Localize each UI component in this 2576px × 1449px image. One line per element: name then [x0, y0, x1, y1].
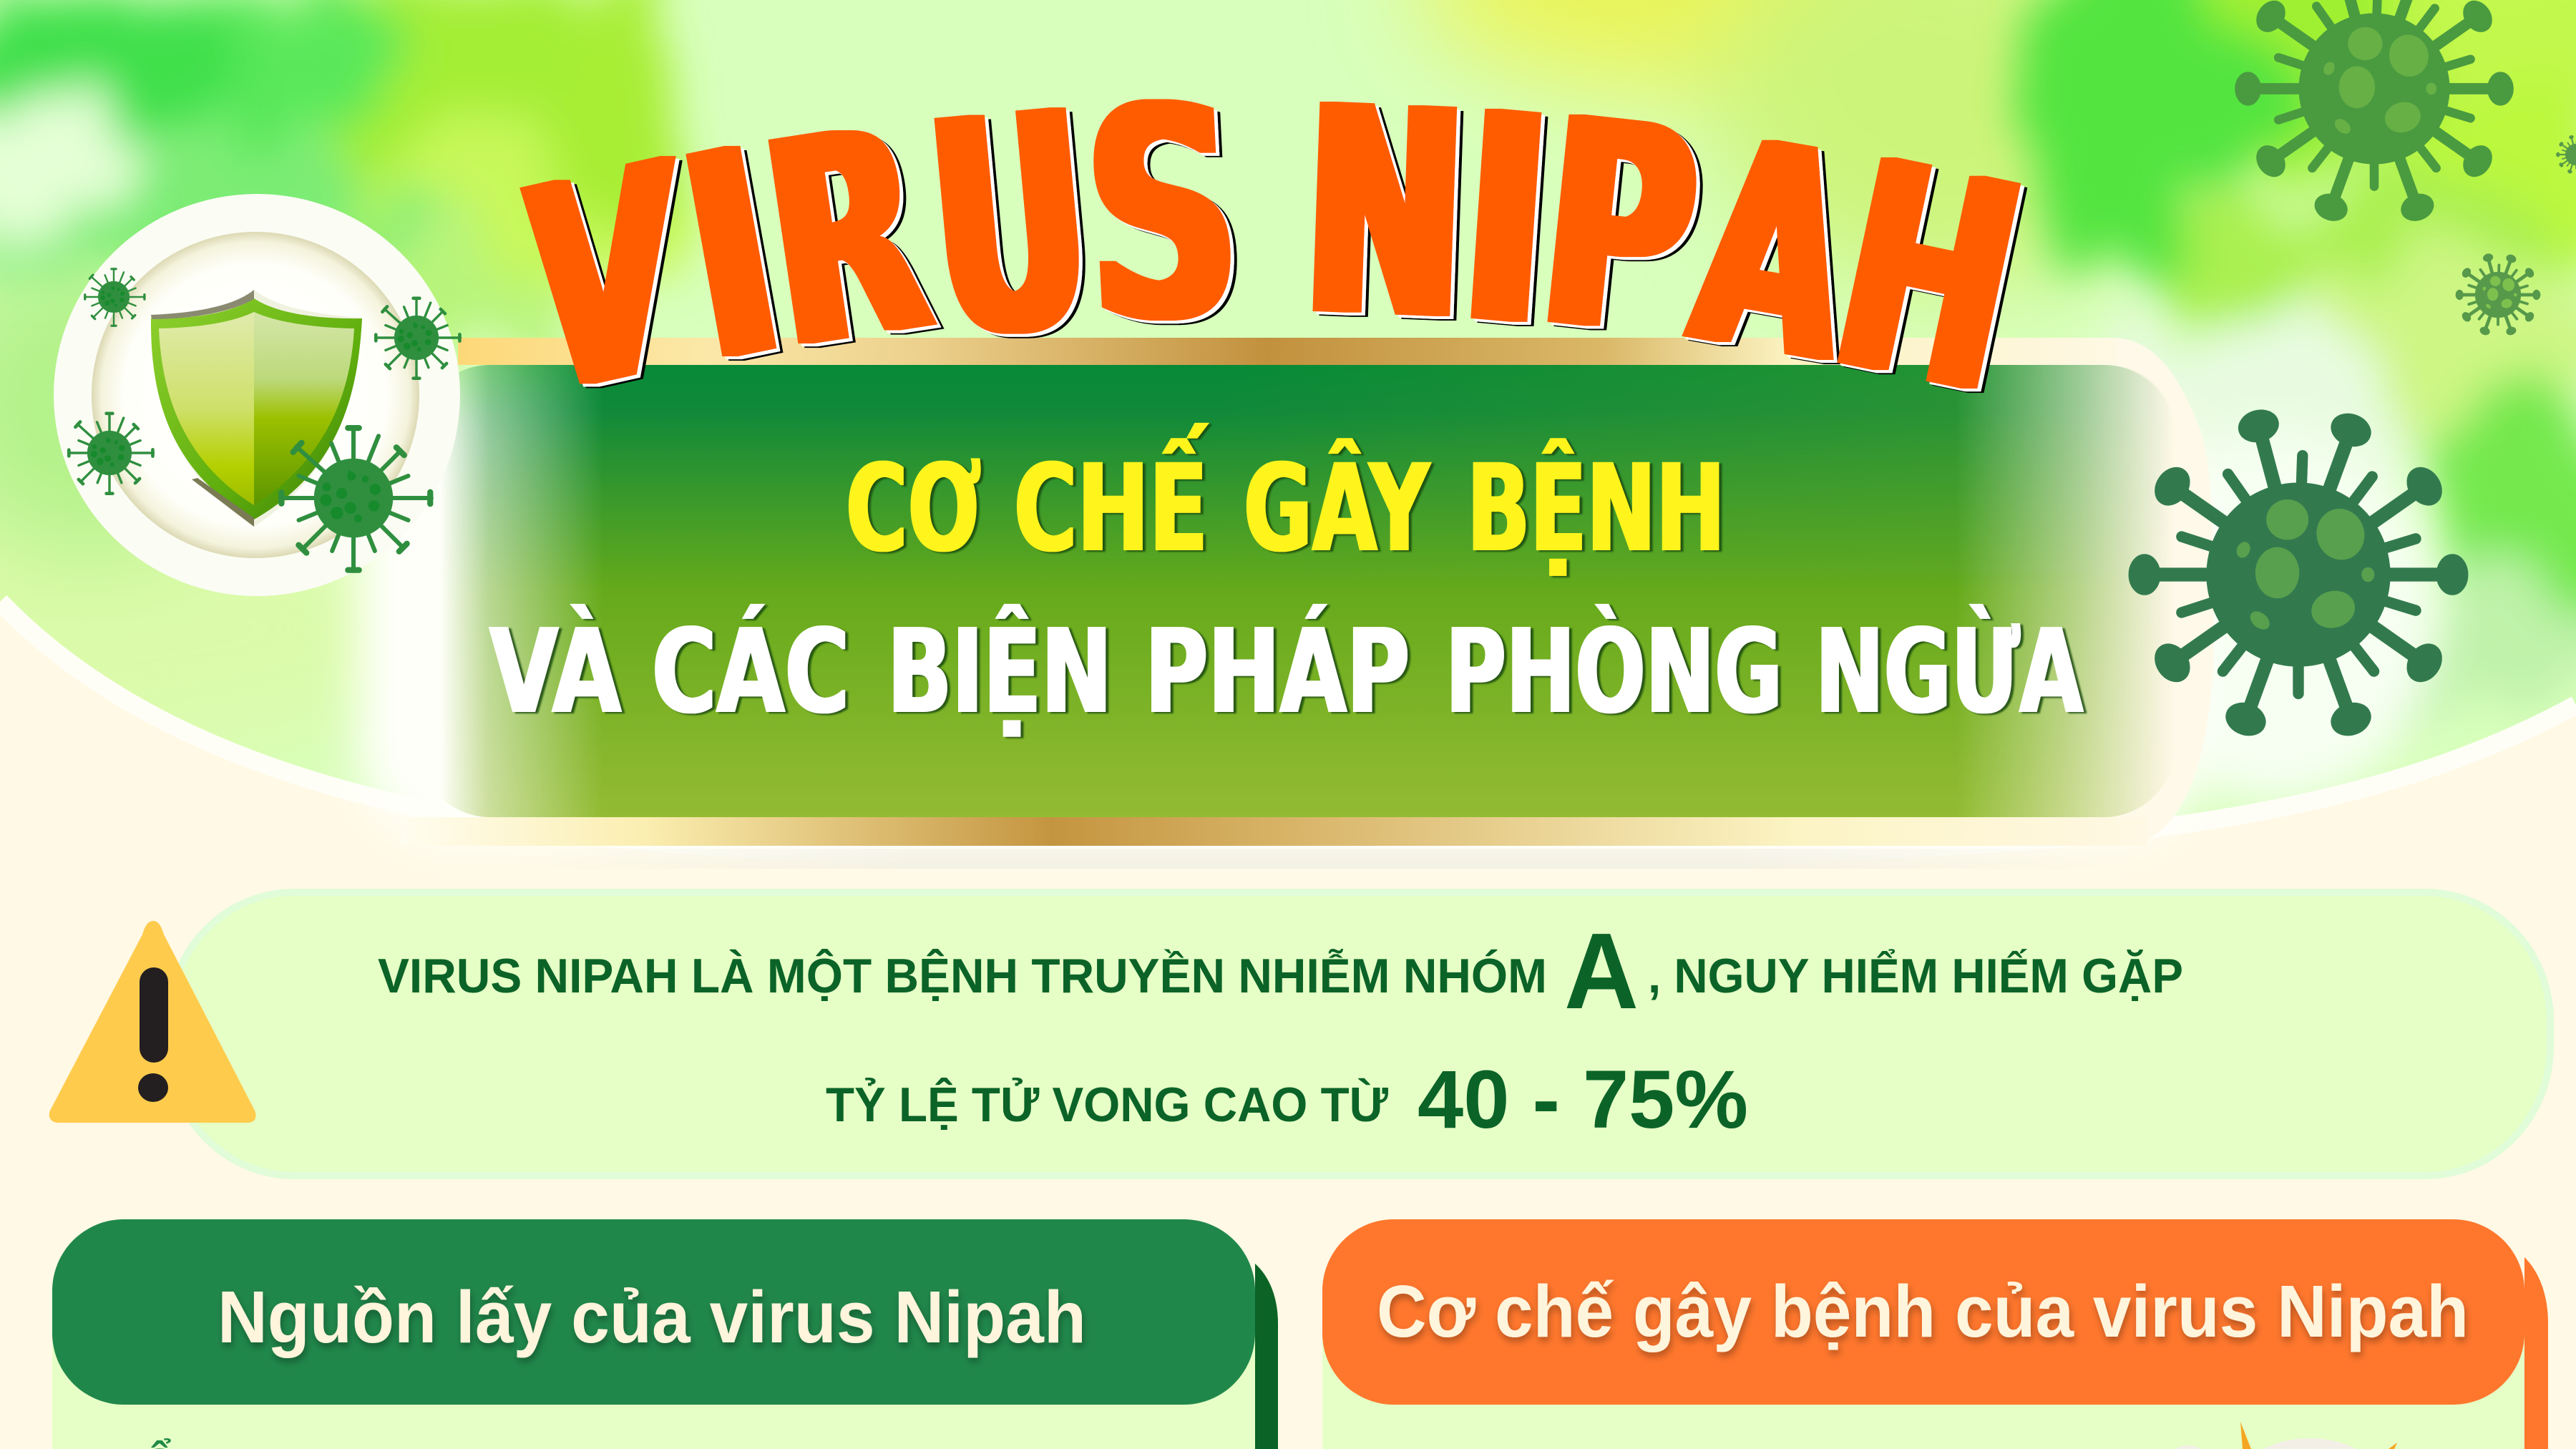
- warning line 1: [378, 910, 2183, 1031]
- banner gold top band: [458, 338, 2118, 365]
- subtitle line 2: [489, 604, 2083, 740]
- warning line 2: 40 - 75%: [1418, 1054, 1748, 1146]
- badge outer ring: [54, 194, 460, 596]
- warning panel background: [169, 892, 2550, 1176]
- small virus right: [376, 298, 460, 379]
- illustration peeking at bottom: [2160, 1422, 2397, 1449]
- subtitle line 2: PHÁP: [1145, 604, 1410, 740]
- right panel side bar: [2524, 1257, 2548, 1449]
- panel: right, pathogenesis: [1322, 1219, 2548, 1449]
- banner green body: [419, 365, 2175, 817]
- warning line 1: VIRUS NIPAH LÀ MỘT BỆNH TRUYỀN NHIỄM NHÓM: [378, 948, 1547, 1003]
- title: VIRUS NIPAH: S: [1081, 43, 1244, 389]
- title: VIRUS NIPAH: U: [919, 47, 1101, 406]
- left panel header: [52, 1219, 1255, 1405]
- subtitle line 2: BIỆN: [887, 605, 1112, 740]
- warning line 2: [826, 1054, 1748, 1146]
- right panel body: [1322, 1288, 2524, 1449]
- title: VIRUS NIPAH: H: [1813, 98, 2042, 459]
- header background: green watercolor: [0, 0, 2576, 816]
- subtitle line 1: CHẾ: [1014, 422, 1208, 579]
- shield: [151, 290, 362, 527]
- banner cream right border: [1932, 338, 2214, 846]
- title: VIRUS NIPAH: R: [751, 65, 943, 413]
- right panel header: [1322, 1219, 2524, 1405]
- shadow band under banner: [501, 849, 2147, 869]
- small virus top-left: [84, 268, 145, 326]
- left panel body: [52, 1288, 1255, 1449]
- title: VIRUS NIPAH: V: [524, 98, 684, 463]
- subtitle line 2: CÁC: [652, 604, 849, 740]
- subtitle line 2: VÀ: [489, 604, 621, 740]
- large virus on shield: [280, 427, 431, 571]
- right panel heading: Cơ chế gây bệnh của virus Nipah: [1377, 1270, 2469, 1352]
- curved white band under header: [0, 602, 2576, 853]
- title: VIRUS NIPAH: [524, 43, 2042, 463]
- icon: virus top right: [2235, 0, 2513, 225]
- subtitle line 2: PHÒNG: [1445, 604, 1782, 740]
- left panel side bar: [1255, 1264, 1278, 1449]
- banner: [358, 338, 2214, 846]
- warning line 1: , NGUY HIỂM HIẾM GẶP: [1648, 948, 2183, 1003]
- banner gold bottom band: [401, 817, 2147, 846]
- small virus left: [69, 413, 153, 494]
- icon: shield badge with viruses: [54, 194, 460, 596]
- subtitle line 1: BỆNH: [1467, 437, 1725, 579]
- banner white glow: [358, 401, 2204, 844]
- subtitle line 1: GÂY: [1244, 437, 1431, 579]
- icon: warning triangle: [49, 921, 256, 1123]
- title: VIRUS NIPAH: I: [665, 87, 800, 426]
- subtitle line 1: CƠ: [846, 438, 981, 579]
- panel: left, source of infection: [52, 1219, 1278, 1449]
- subtitle line 2: NGỪA: [1815, 605, 2083, 740]
- warning line 2: TỶ LỆ TỬ VONG CAO TỪ: [826, 1077, 1389, 1132]
- icon: tiny virus at right edge: [2556, 135, 2576, 174]
- warning panel: [169, 892, 2550, 1176]
- title: VIRUS NIPAH: I: [1454, 50, 1558, 392]
- badge inner disc: [92, 232, 419, 558]
- left panel heading: Nguồn lấy của virus Nipah: [218, 1276, 1086, 1358]
- warning line 1: A: [1564, 910, 1639, 1031]
- title: VIRUS NIPAH: P: [1530, 57, 1709, 404]
- title: VIRUS NIPAH: A: [1678, 76, 1869, 427]
- icon: large virus right: [2129, 406, 2468, 741]
- icon: small virus right: [2456, 253, 2540, 336]
- subtitle line 1: [846, 422, 1725, 579]
- title: VIRUS NIPAH: N: [1301, 44, 1468, 385]
